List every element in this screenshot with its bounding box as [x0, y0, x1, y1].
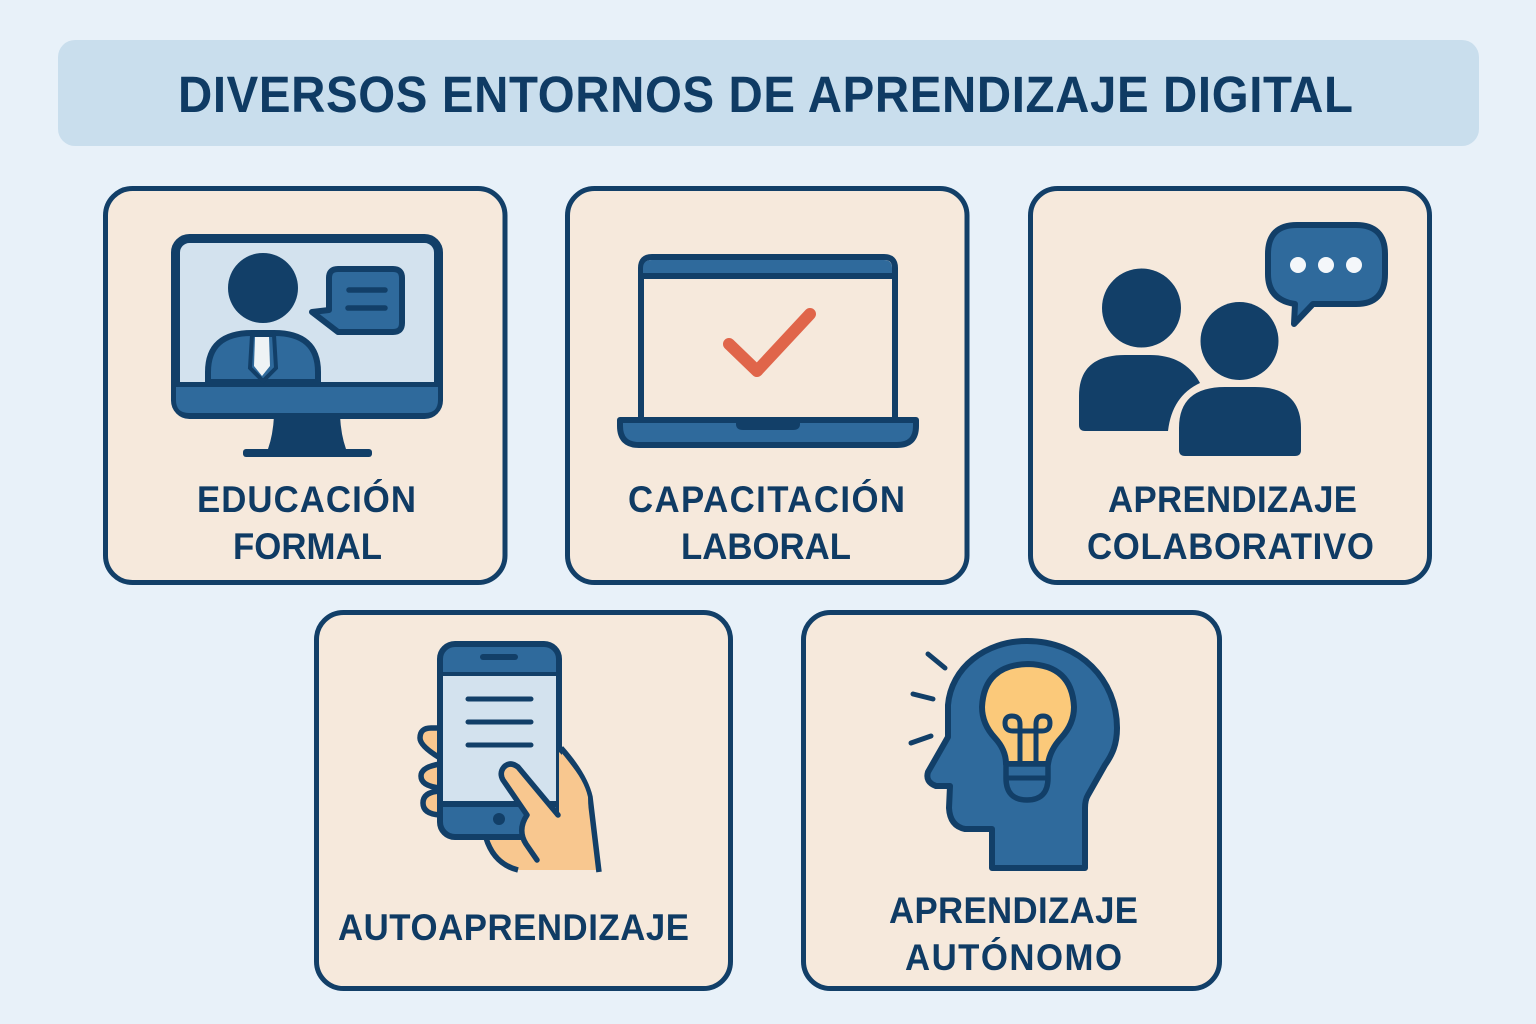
- label: FORMAL: [233, 526, 382, 567]
- icon: monitor with presenter: [176, 238, 438, 457]
- label: [628, 479, 905, 567]
- label: CAPACITACIÓN: [628, 479, 905, 520]
- label: APRENDIZAJE: [1108, 479, 1357, 520]
- label: [889, 890, 1138, 978]
- panel: aprendizaje autónomo: [804, 612, 1220, 988]
- icon: check mark: [729, 314, 810, 371]
- label: AUTÓNOMO: [905, 937, 1122, 978]
- panel: aprendizaje colaborativo: [1030, 188, 1430, 582]
- icon: two people with speech bubble: [1079, 225, 1385, 456]
- title banner: [58, 40, 1479, 146]
- icon: laptop with check mark: [620, 257, 916, 445]
- label: [1087, 479, 1374, 567]
- title: DIVERSOS ENTORNOS DE APRENDIZAJE DIGITAL: [178, 66, 1353, 123]
- icon: hand holding phone: [420, 644, 600, 872]
- panel: autoaprendizaje: [316, 612, 730, 988]
- panel: educación formal: [106, 188, 505, 582]
- label: COLABORATIVO: [1087, 526, 1374, 567]
- label: EDUCACIÓN: [197, 479, 416, 520]
- panel: capacitación laboral: [568, 188, 967, 582]
- label: APRENDIZAJE: [889, 890, 1138, 931]
- label: LABORAL: [681, 526, 851, 567]
- label: [197, 479, 416, 567]
- label: AUTOAPRENDIZAJE: [338, 907, 689, 948]
- icon: head with light bulb: [911, 641, 1117, 868]
